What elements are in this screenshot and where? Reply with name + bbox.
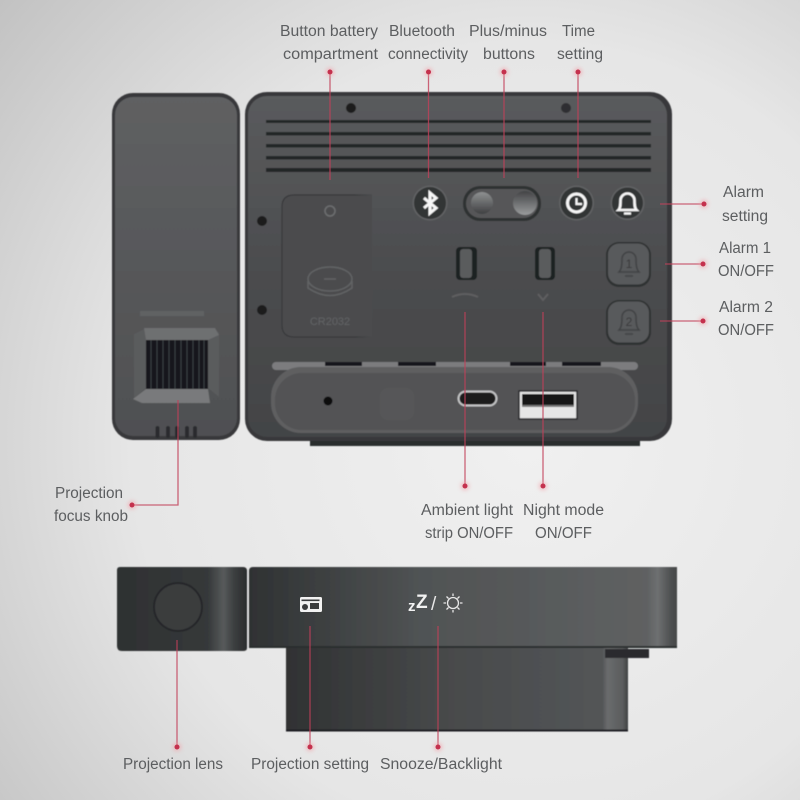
label: button battery compartment: compartment — [283, 46, 379, 63]
label: alarm setting: setting — [722, 208, 768, 225]
alarm 1 button: 1 — [626, 257, 633, 271]
bottom strip — [271, 362, 638, 433]
label: snooze/backlight: Snooze/Backlight — [380, 756, 503, 773]
label: bluetooth connectivity: connectivity — [388, 46, 468, 63]
panel: top view of clock — [117, 567, 677, 732]
label: projection focus knob — [54, 485, 128, 525]
icon: snooze and backlight: / — [431, 594, 437, 615]
label: projection focus knob: focus knob — [54, 508, 128, 525]
icon: snooze and backlight: Z — [416, 592, 428, 613]
label: alarm 2 on/off: ON/OFF — [718, 322, 774, 339]
icon: projection setting — [300, 597, 322, 612]
label: plus/minus buttons: buttons — [483, 46, 535, 63]
battery compartment — [282, 195, 372, 337]
alarm 1 button — [606, 242, 651, 287]
battery compartment: CR2032 — [310, 316, 350, 328]
label: ambient light strip on/off: Ambient light — [421, 502, 514, 519]
label: alarm 2 on/off: Alarm 2 — [719, 299, 773, 316]
projector head — [117, 567, 247, 651]
underside detail — [605, 649, 649, 658]
USB-A port — [519, 391, 577, 419]
callout lines — [132, 72, 704, 747]
top body — [249, 567, 677, 648]
panel: rear view of clock — [112, 92, 672, 446]
label: alarm setting — [722, 184, 768, 225]
main body — [245, 92, 672, 446]
label: bluetooth connectivity: Bluetooth — [389, 23, 455, 40]
icon: snooze and backlight — [408, 592, 462, 615]
night mode switch — [535, 247, 555, 300]
projection lens — [153, 582, 203, 632]
arm engraved text — [140, 311, 204, 316]
alarm 2 button: 2 — [626, 315, 633, 329]
label: bluetooth connectivity — [388, 23, 468, 63]
screw holes — [257, 103, 571, 315]
projector arm — [112, 93, 240, 440]
label: time setting: setting — [557, 46, 603, 63]
alarm 2 button — [606, 300, 651, 345]
label: projection setting: Projection setting — [251, 756, 369, 773]
label: night mode on/off: Night mode — [523, 502, 604, 519]
label: time setting — [557, 23, 603, 63]
label: alarm setting: Alarm — [723, 184, 764, 201]
icon: snooze and backlight: z — [408, 598, 416, 615]
Bluetooth button — [412, 186, 448, 220]
label: plus/minus buttons — [469, 23, 547, 63]
clock button — [559, 186, 594, 220]
vent dots — [158, 428, 195, 436]
label: alarm 1 on/off: Alarm 1 — [719, 240, 771, 257]
speaker vents — [266, 120, 651, 172]
label: projection focus knob: Projection — [55, 485, 123, 502]
label: button battery compartment — [280, 23, 379, 63]
label: button battery compartment: Button battery — [280, 23, 378, 40]
callout dots — [128, 68, 708, 751]
USB-C port — [458, 392, 496, 406]
focus knob — [133, 328, 219, 403]
label: alarm 1 on/off — [718, 240, 774, 280]
lower body — [286, 648, 628, 731]
label: night mode on/off: ON/OFF — [535, 525, 592, 542]
label: alarm 1 on/off: ON/OFF — [718, 263, 774, 280]
plus/minus buttons — [463, 186, 541, 221]
label: ambient light strip on/off: strip ON/OFF — [425, 525, 513, 542]
label: night mode on/off — [523, 502, 604, 542]
ambient light switch — [452, 247, 478, 297]
label: ambient light strip on/off — [421, 502, 514, 542]
label: time setting: Time — [562, 23, 595, 40]
bell button — [610, 186, 644, 220]
label: projection lens: Projection lens — [123, 756, 223, 773]
label: plus/minus buttons: Plus/minus — [469, 23, 547, 40]
label: alarm 2 on/off — [718, 299, 774, 339]
